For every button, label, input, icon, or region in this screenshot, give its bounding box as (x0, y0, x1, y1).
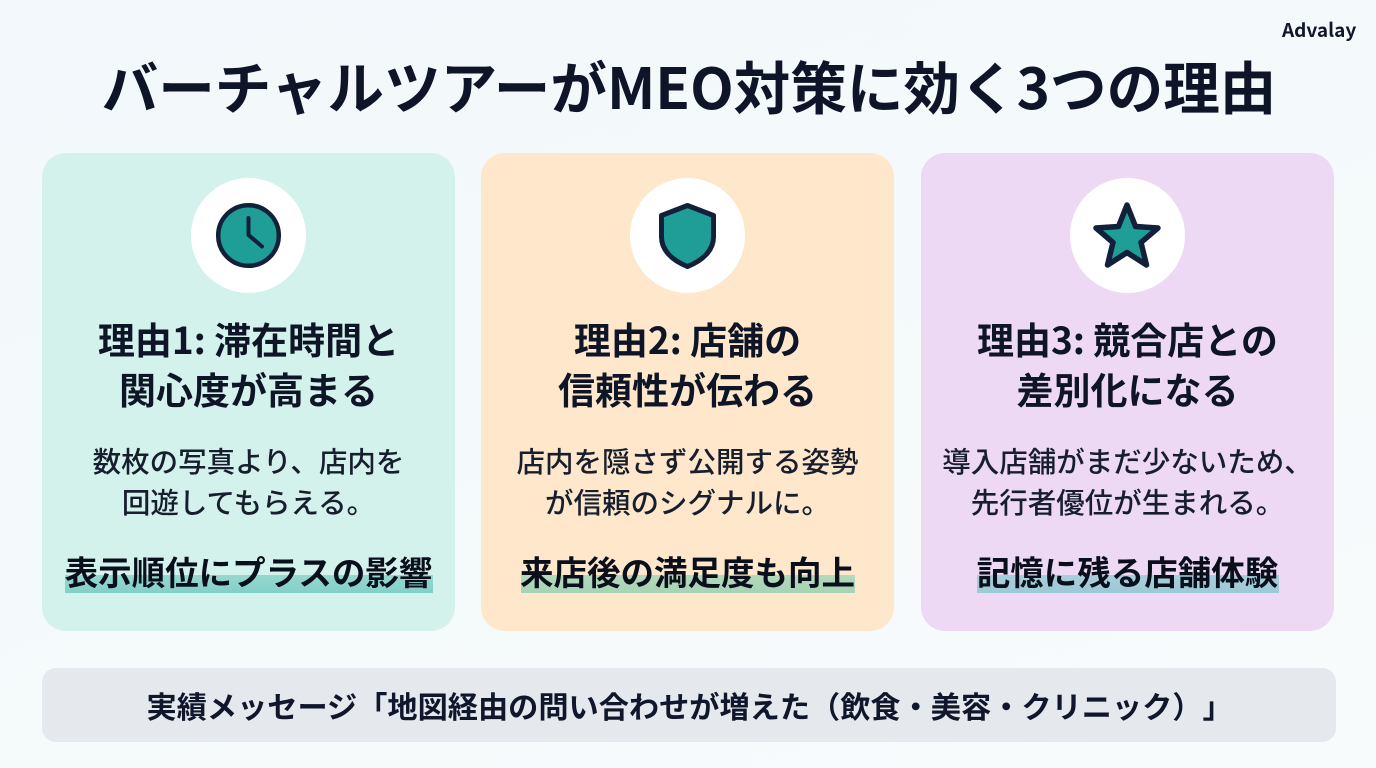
footer banner (42, 668, 1336, 742)
heading: reason 3 (977, 311, 1278, 415)
text: reason 2 body: 店内を隠さず公開する姿勢 (516, 440, 858, 481)
heading: reason 1: 関心度が高まる (119, 361, 378, 415)
panel: reason 3 (921, 153, 1334, 631)
text: reason 1 body (93, 440, 404, 522)
heading: reason 2: 信頼性が伝わる (558, 361, 817, 415)
callout: reason 1: 表示順位にプラスの影響 (65, 546, 432, 595)
text: reason 1 body: 回遊してもらえる。 (122, 481, 375, 522)
highlight band (521, 575, 855, 593)
highlight band (977, 575, 1279, 593)
icon: shield (630, 178, 745, 293)
heading: reason 3: 差別化になる (1016, 361, 1238, 415)
heading: reason 2 (558, 311, 817, 415)
heading: reason 1 (98, 311, 399, 415)
text: reason 3 body: 導入店舗がまだ少ないため、 (942, 440, 1313, 481)
callout: reason 3: 記憶に残る店舗体験 (977, 546, 1278, 595)
heading: reason 2: 理由2: 店舗の (574, 311, 801, 365)
text: reason 3 body: 先行者優位が生まれる。 (971, 481, 1284, 522)
icon: star (1070, 178, 1185, 293)
panel: reason 1 (42, 153, 455, 631)
heading: reason 1: 理由1: 滞在時間と (98, 311, 399, 365)
text: reason 3 body (942, 440, 1313, 522)
brand label: Advalay (1282, 16, 1356, 43)
text: reason 2 body: が信頼のシグナルに。 (545, 481, 830, 522)
heading: reason 3: 理由3: 競合店との (977, 311, 1278, 365)
title: バーチャルツアーがMEO対策に効く3つの理由 (102, 44, 1276, 126)
text: reason 1 body: 数枚の写真より、店内を (93, 440, 404, 481)
highlight band (65, 575, 433, 593)
panel: reason 2 (481, 153, 894, 631)
callout: reason 2: 来店後の満足度も向上 (520, 546, 855, 595)
icon: clock (191, 178, 306, 293)
footer message: 実績メッセージ「地図経由の問い合わせが増えた（飲食・美容・クリニック）」 (146, 683, 1233, 727)
text: reason 2 body (516, 440, 858, 522)
